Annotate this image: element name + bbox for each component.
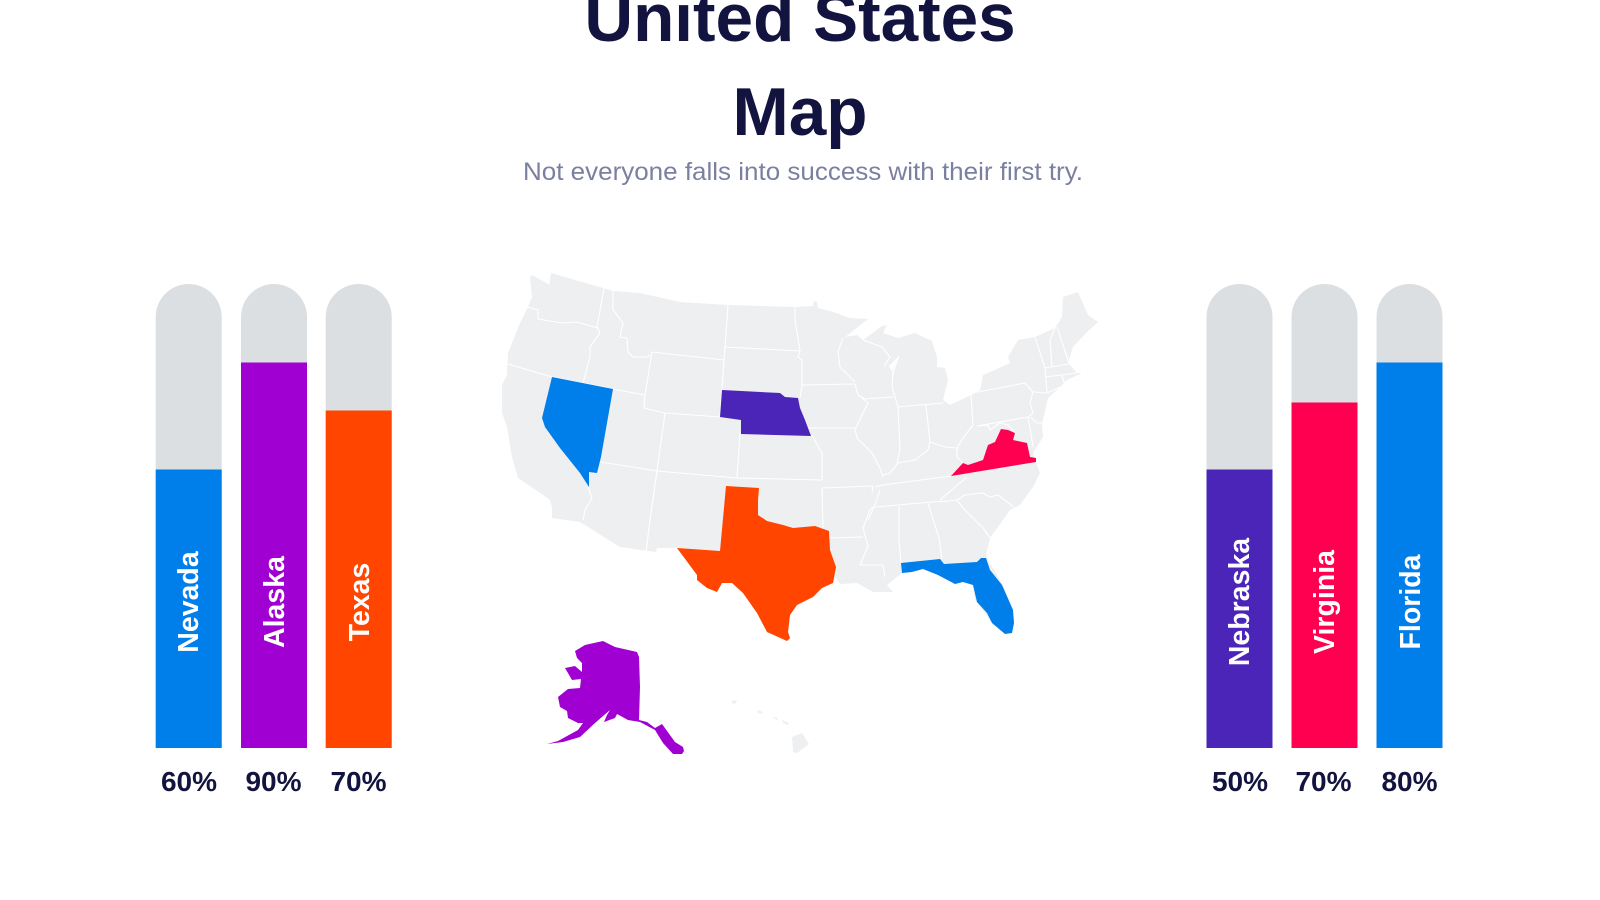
state: Virginia [951, 429, 1036, 476]
bar: Virginia 70%: Virginia [1309, 549, 1341, 654]
bar: Nevada 60%: 60% [161, 766, 217, 797]
state: Texas [677, 486, 836, 641]
state: Florida [901, 558, 1014, 634]
map base: contiguous states [502, 273, 1098, 641]
bar: Alaska 90%: 90% [245, 766, 302, 797]
bar: Florida 80%: Florida [1395, 553, 1427, 650]
bar: Alaska 90%: Alaska [259, 555, 291, 648]
bar: Nebraska 50% [1206, 284, 1272, 797]
bar: Florida 80% [1376, 284, 1442, 797]
title: Map [732, 75, 868, 150]
bar: Nevada 60% [156, 284, 222, 797]
state: Alaska [547, 641, 684, 754]
bar: Florida 80%: 80% [1381, 766, 1438, 797]
bar: Virginia 70%: 70% [1295, 766, 1352, 797]
bar: Nevada 60%: Nevada [173, 550, 205, 653]
title [584, 0, 1016, 150]
bar: Texas 70% [326, 284, 392, 797]
map: United States [502, 273, 1098, 754]
state: Hawaii [731, 700, 809, 753]
state: Nevada [542, 377, 613, 487]
subtitle: Not everyone falls into success with their first try. [523, 158, 1083, 186]
bar: Alaska 90% [241, 284, 307, 797]
bar: Nebraska 50%: Nebraska [1224, 537, 1256, 666]
bar: Nebraska 50%: 50% [1212, 766, 1268, 797]
state: Nebraska [720, 390, 811, 436]
bar: Texas 70%: Texas [344, 563, 376, 641]
bar: Texas 70%: 70% [330, 766, 387, 797]
bar: Virginia 70% [1292, 284, 1358, 797]
